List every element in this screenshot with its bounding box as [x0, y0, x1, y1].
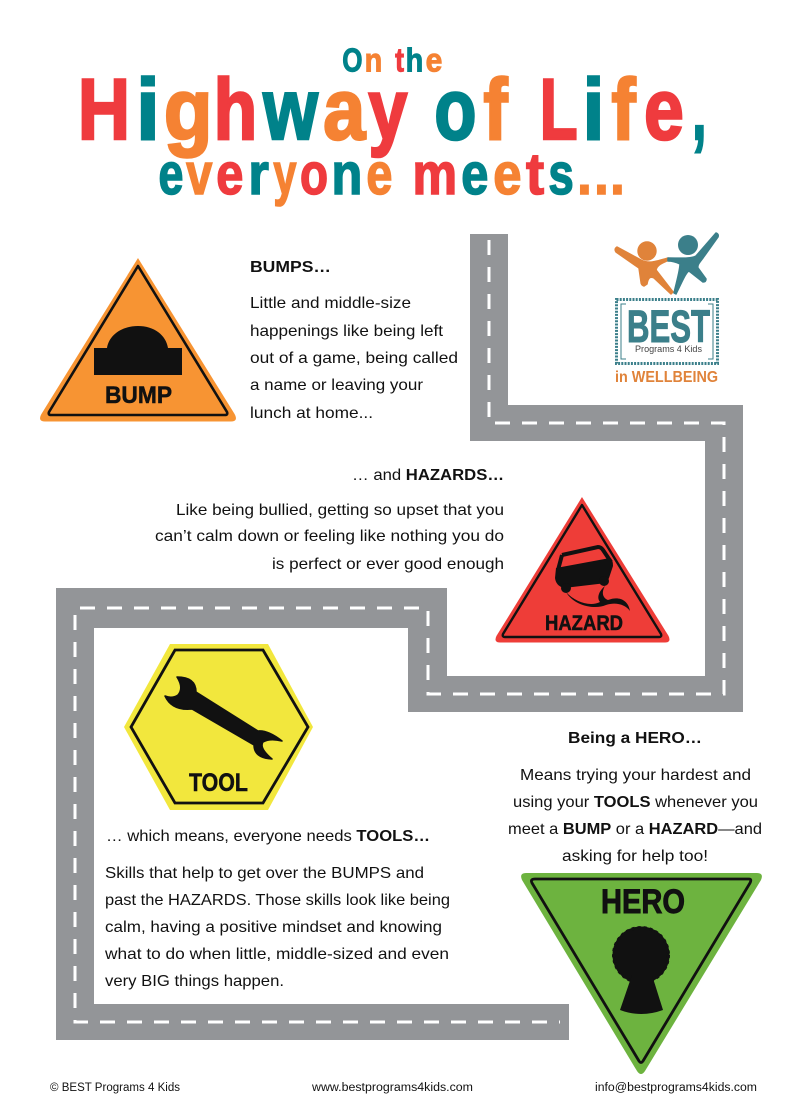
- title line: On the: [342, 41, 442, 79]
- text block: hazards description: Like being bullied, getting so upset that you: [176, 502, 504, 519]
- text block: tools description: what to do when little, middle-sized and even: [104, 946, 449, 963]
- footer: info@bestprograms4kids.com: [595, 1082, 757, 1094]
- text block: tools description: very BIG things happen.: [105, 973, 284, 990]
- logo: BEST Programs 4 Kids: [615, 233, 718, 386]
- title line: On the: t: [395, 43, 404, 79]
- text block: bumps description: a name or leaving your: [250, 377, 424, 394]
- title line: Highway of Life: h: [214, 60, 257, 157]
- text block: tools description: calm, having a positive mindset and knowing: [105, 919, 442, 936]
- text block: hero description: asking for help too!: [562, 848, 708, 865]
- title line: On the: e: [426, 41, 442, 79]
- logo: BEST Programs 4 Kids: Programs 4 Kids: [635, 344, 702, 355]
- title line: Highway of Life: i: [583, 62, 604, 158]
- heading: hazards: … and HAZARDS…: [352, 467, 504, 484]
- title: [78, 41, 706, 208]
- text block: tools description: past the HAZARDS. Those skills look like being: [105, 892, 450, 909]
- sign label: HERO: [601, 883, 685, 921]
- text block: tools description: Skills that help to get over the BUMPS and: [105, 865, 424, 882]
- icon: skidding car: [562, 547, 611, 562]
- text block: bumps description: [250, 295, 458, 422]
- footer: [50, 1082, 757, 1094]
- title line: Highway of Life: H: [78, 61, 130, 157]
- title line: everyone meets: [158, 141, 625, 208]
- text block: tools description: [104, 865, 450, 990]
- icon: orange figure: [615, 247, 673, 294]
- title line: everyone meets: e: [158, 143, 183, 208]
- title line: everyone meets: .: [610, 142, 625, 207]
- title line: Highway of Life: e: [644, 61, 684, 157]
- title line: everyone meets: e: [493, 141, 522, 207]
- sign: tool: [124, 644, 313, 810]
- title line: Highway of Life: y: [368, 61, 408, 157]
- title line: Highway of Life: w: [262, 61, 319, 157]
- title line: Highway of Life: i: [136, 62, 160, 158]
- title line: everyone meets: e: [366, 142, 392, 207]
- title line: everyone meets: m: [412, 142, 457, 207]
- icon: skid marks: [566, 586, 630, 611]
- logo text: BEST: [627, 301, 710, 352]
- title line: everyone meets: s: [548, 143, 574, 208]
- sign: hero: [521, 873, 762, 1074]
- text block: hero description: Means trying your hardest and: [520, 767, 751, 784]
- title line: Highway of Life: g: [164, 61, 213, 157]
- sign label: HAZARD: [545, 612, 623, 635]
- icon: rosette: [612, 926, 670, 984]
- title line: everyone meets: .: [594, 142, 609, 207]
- title line: On the: h: [406, 42, 423, 79]
- title line: Highway of Life: o: [434, 61, 476, 158]
- heading: bumps: BUMPS…: [250, 259, 331, 276]
- title line: Highway of Life: a: [323, 62, 366, 158]
- title line: Highway of Life: f: [612, 61, 636, 157]
- sign label: TOOL: [189, 769, 248, 797]
- footer: © BEST Programs 4 Kids: [50, 1082, 180, 1094]
- title line: everyone meets: y: [273, 141, 296, 207]
- text block: hazards description: is perfect or ever good enough: [272, 556, 504, 573]
- sign label: BUMP: [105, 382, 172, 409]
- logo: BEST Programs 4 Kids: in WELLBEING: [615, 369, 718, 386]
- title line: On the: n: [365, 42, 382, 79]
- title line: Highway of Life: L: [540, 61, 578, 157]
- text block: bumps description: out of a game, being called: [250, 350, 458, 367]
- title line: On the: O: [342, 43, 363, 79]
- text block: bumps description: Little and middle-size: [250, 295, 411, 312]
- title line: everyone meets: v: [186, 142, 213, 207]
- title line: everyone meets: e: [461, 142, 488, 207]
- title line: everyone meets: .: [577, 142, 592, 207]
- heading: tools: … which means, everyone needs TOOLS…: [106, 828, 430, 845]
- title line: everyone meets: e: [216, 142, 243, 207]
- icon: teal figure: [668, 233, 718, 294]
- sign: bump: [41, 259, 235, 421]
- text block: hazards description: [155, 502, 504, 573]
- heading: hero: Being a HERO…: [568, 730, 702, 747]
- text block: bumps description: happenings like being left: [250, 323, 444, 340]
- text block: bumps description: lunch at home...: [250, 405, 373, 422]
- text block: hero description: meet a BUMP or a HAZARD—and: [508, 821, 762, 838]
- logo stamp box: [616, 300, 718, 364]
- title line: everyone meets: n: [332, 142, 362, 207]
- title line: everyone meets: o: [300, 142, 328, 208]
- road: [56, 234, 743, 1040]
- title line: Highway of Life: ,: [692, 61, 706, 157]
- title line: Highway of Life: f: [484, 61, 508, 157]
- title line: everyone meets: r: [248, 142, 269, 207]
- title line: Highway of Life: [78, 60, 706, 158]
- icon: wrench: [165, 677, 282, 759]
- footer: www.bestprograms4kids.com: [311, 1082, 473, 1094]
- text block: hero description: [508, 767, 762, 865]
- text block: hero description: using your TOOLS whenever you: [513, 794, 758, 811]
- bump symbol: [94, 326, 182, 375]
- title line: everyone meets: t: [526, 141, 544, 207]
- sign: hazard: [496, 498, 669, 642]
- text block: hazards description: can’t calm down or feeling like nothing you do: [155, 528, 504, 545]
